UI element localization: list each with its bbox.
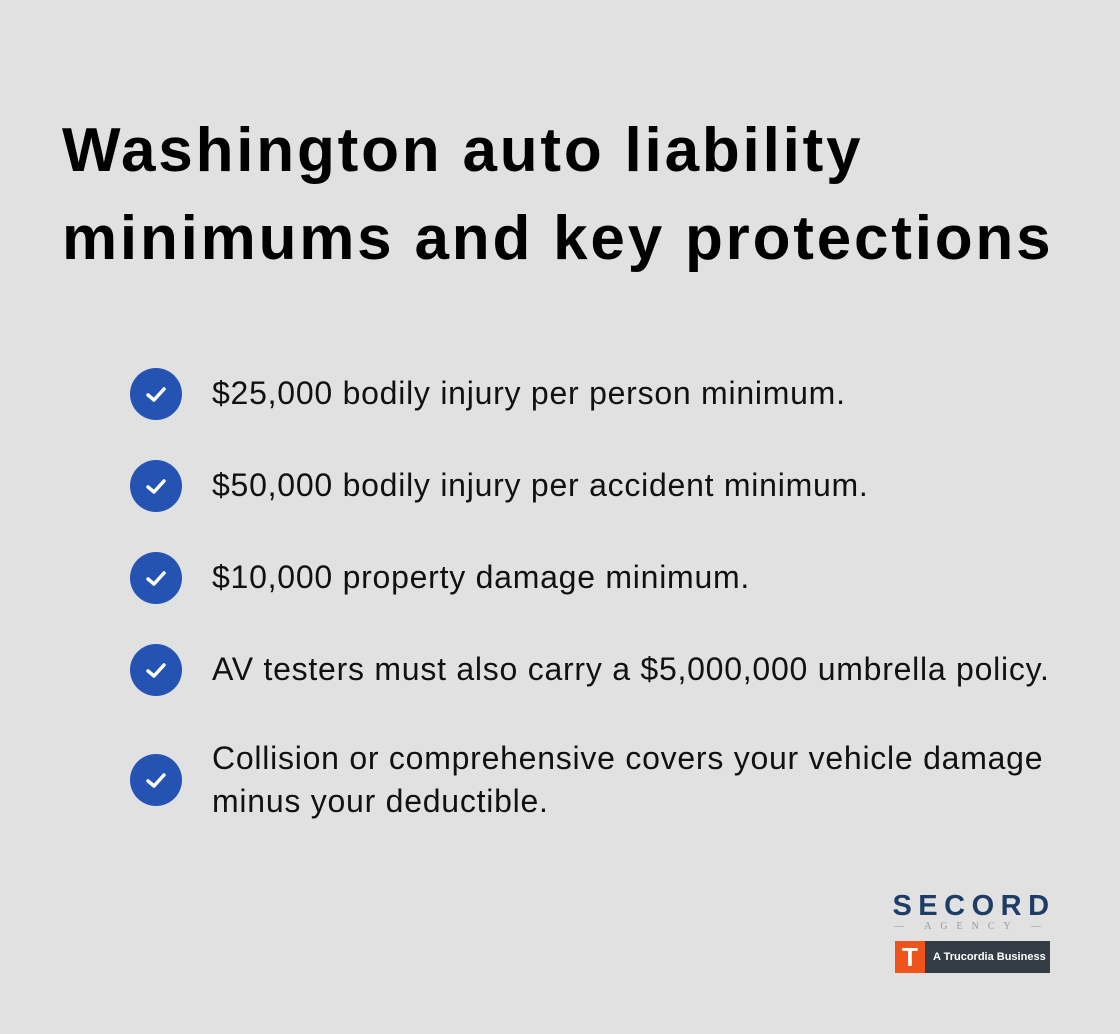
- text: [212, 740, 1043, 819]
- text: AV testers must also carry a $5,000,000 umbrella policy.: [212, 651, 1050, 687]
- icon: check: [130, 754, 182, 806]
- logo: trucordia: A Trucordia Business: [933, 951, 1046, 963]
- item 1: [130, 368, 846, 420]
- icon: check: [130, 644, 182, 696]
- title: [62, 116, 1053, 273]
- logo: agency: — AGENCY —: [894, 921, 1050, 932]
- item 3: [130, 552, 750, 604]
- title: minimums and key protections: [62, 204, 1053, 273]
- logo: [892, 890, 1056, 973]
- text: $50,000 bodily injury per accident minimum.: [212, 467, 869, 503]
- item 5: [130, 740, 1043, 819]
- icon: check: [130, 460, 182, 512]
- title: Washington auto liability: [62, 116, 863, 185]
- text: $10,000 property damage minimum.: [212, 559, 750, 595]
- item 4: [130, 644, 1050, 696]
- text: minus your deductible.: [212, 783, 549, 819]
- icon: check: [130, 368, 182, 420]
- logo: secord: SECORD: [892, 890, 1056, 922]
- icon: check: [130, 552, 182, 604]
- text: $25,000 bodily injury per person minimum.: [212, 375, 846, 411]
- logo: trucordia: [895, 941, 1050, 973]
- text: Collision or comprehensive covers your vehicle damage: [212, 740, 1043, 776]
- item 2: [130, 460, 869, 512]
- logo: trucordia: T: [902, 942, 918, 972]
